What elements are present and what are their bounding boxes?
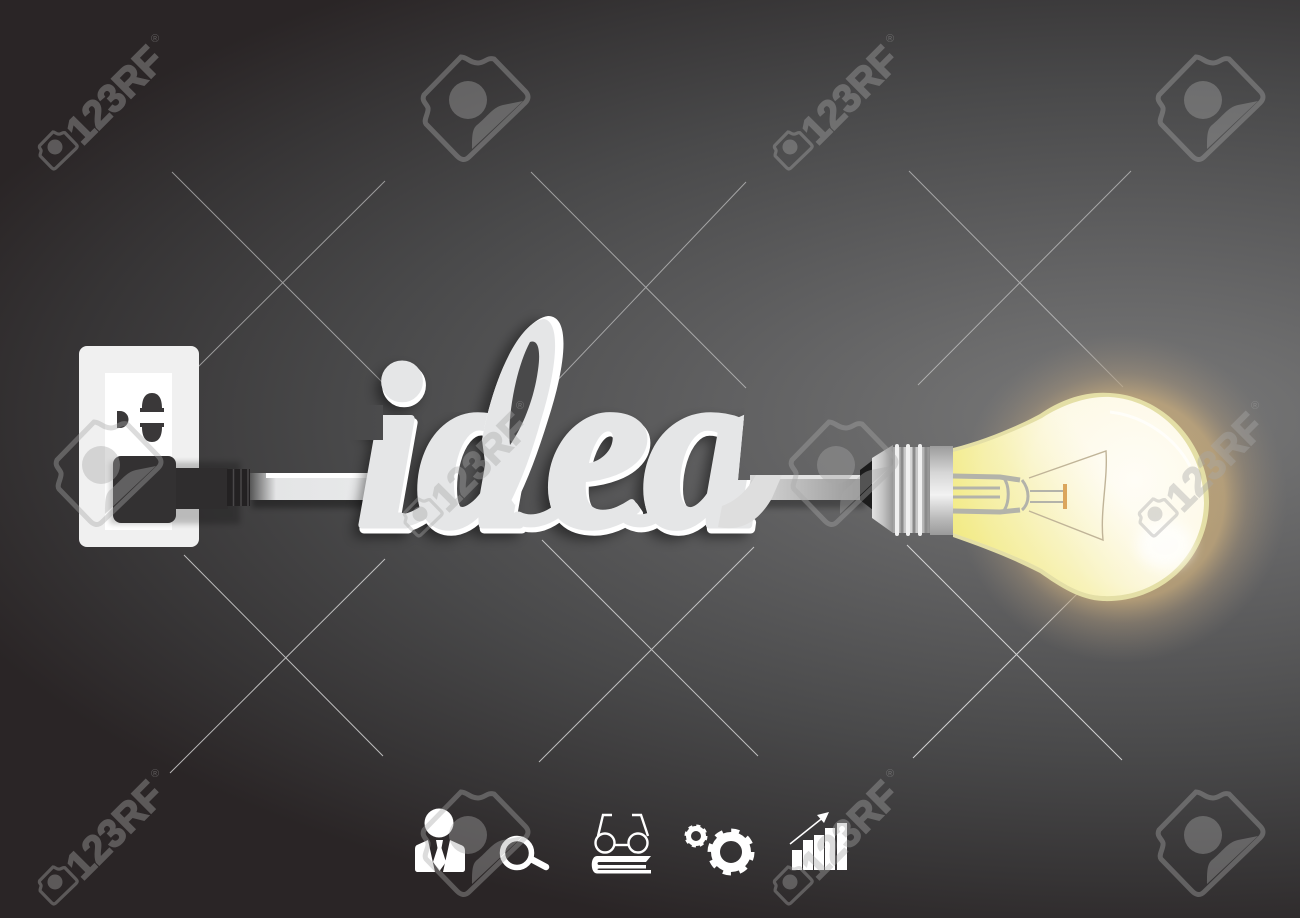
left cable: [250, 473, 382, 508]
bulb glow: [957, 333, 1287, 663]
wall outlet: [79, 346, 250, 547]
watermark: camera top right: [1158, 57, 1263, 160]
watermark: camera on outlet: [56, 422, 161, 525]
watermark: text top centre: ®: [886, 33, 894, 45]
icon: glasses on book: [592, 815, 651, 874]
letter joining strokes: [388, 512, 662, 521]
d loop shadow: [474, 320, 545, 480]
strain relief ribs: [227, 469, 250, 506]
socket holes: [117, 393, 164, 442]
watermark: text middle on bulb: 123RF: [1158, 405, 1273, 520]
watermark: camera on cable: [791, 422, 896, 525]
icon: businessman: [415, 808, 465, 872]
word face: idea: [356, 319, 760, 576]
d loop face: [482, 319, 555, 505]
icons row: [415, 808, 847, 874]
watermark: text bottom centre: 123RF: [793, 773, 908, 888]
outlet plate: [79, 346, 199, 547]
filament frame: [1029, 451, 1106, 540]
bulb collar: [930, 446, 953, 535]
screw threads: [893, 446, 931, 534]
watermark: text bottom left: 123RF: [58, 773, 173, 888]
watermark: text top left: ®: [151, 33, 159, 45]
right cable: [750, 475, 865, 508]
word highlight edge: idea: [358, 323, 762, 580]
watermark: text middle on word: ®: [516, 400, 524, 412]
d loop outer edge: [482, 316, 563, 505]
icon: rising bar chart: [790, 812, 847, 870]
word layers: [358, 360, 756, 536]
watermark: camera bottom centre-left: [423, 792, 528, 895]
watermark: text bottom left: ®: [151, 768, 159, 780]
watermark: camera bottom right: [1158, 792, 1263, 895]
watermark: text top centre: 123RF: [793, 38, 908, 153]
diagonal guide lines: [170, 171, 1131, 773]
icon: gears: [686, 826, 752, 873]
bulb cone: [872, 445, 893, 533]
plug head: [113, 456, 176, 523]
glass neck tint: [953, 397, 1204, 596]
plug shadow: [110, 462, 240, 524]
plug neck: [176, 468, 228, 509]
watermark: camera top centre-left: [423, 57, 528, 160]
a tail into cable: [718, 475, 782, 528]
bulb tip: [860, 460, 873, 510]
watermark: text middle on word: 123RF: [423, 405, 538, 520]
icon: magnifier: [502, 838, 546, 868]
watermark: text top left: 123RF: [58, 38, 173, 153]
d loop counter: [509, 342, 539, 445]
watermark: text middle on bulb: ®: [1251, 400, 1259, 412]
glass outline: [953, 393, 1209, 601]
watermark: text bottom centre: ®: [886, 768, 894, 780]
filament support stems: [953, 476, 1064, 512]
glass body: [953, 397, 1204, 596]
outlet inner panel: [105, 373, 172, 530]
light bulb: [860, 393, 1209, 601]
filament coil: [1063, 484, 1067, 509]
word shadow: idea: [352, 327, 754, 584]
letter joining strokes highlight: [390, 516, 662, 525]
glass reflection: [1110, 412, 1190, 466]
word: idea: [350, 316, 780, 544]
glass lower reflection: [1137, 521, 1193, 569]
